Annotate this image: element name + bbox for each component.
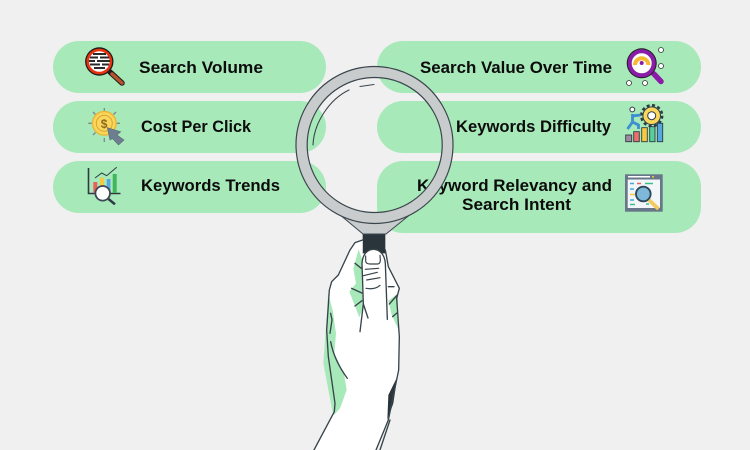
pill: Keywords Difficulty: Keywords Difficulty [456,118,612,136]
pill: Keyword Relevancy and Search Intent: Search Intent [462,196,572,214]
green patches on hand [327,293,347,415]
pill: Keywords Trends [53,161,326,213]
magnifier handle [363,230,385,260]
pill: Keywords Difficulty [377,101,701,153]
pill: Cost Per Click [53,101,326,153]
icon: keywords difficulty climber and gear [626,105,663,142]
hand holding magnifier [314,230,399,450]
pill: Cost Per Click: Cost Per Click [141,118,252,136]
icon: keyword relevancy browser window [625,174,663,212]
pill: Search Volume: Search Volume [139,59,263,77]
hand palm [314,240,399,450]
icon: search volume magnifier [85,47,122,83]
icon: keywords trends chart [88,167,120,204]
hand outlines [314,240,399,450]
pill: Keywords Trends: Keywords Trends [141,177,280,195]
green patch right [388,294,399,330]
thumb [360,249,387,332]
pill: Keyword Relevancy and Search Intent [377,161,701,233]
pill: Search Value Over Time: Search Value Over Time [420,59,612,77]
lens glare [313,84,374,145]
pill: Search Value Over Time [377,41,701,93]
magnifier ring [296,66,453,224]
dark cuff shadow [387,377,397,420]
icon: cost per click coin: $ [101,117,108,131]
magnifier neck [333,209,417,234]
pill: Keyword Relevancy and Search Intent: Keyword Relevancy and [417,177,612,195]
magnifier head [296,66,453,234]
green blob behind hand [323,247,399,416]
icon: cost per click coin [88,108,124,145]
icon: search value gauge magnifier [626,48,664,86]
pill: Search Volume [53,41,326,93]
green patch between fingers [349,249,363,317]
